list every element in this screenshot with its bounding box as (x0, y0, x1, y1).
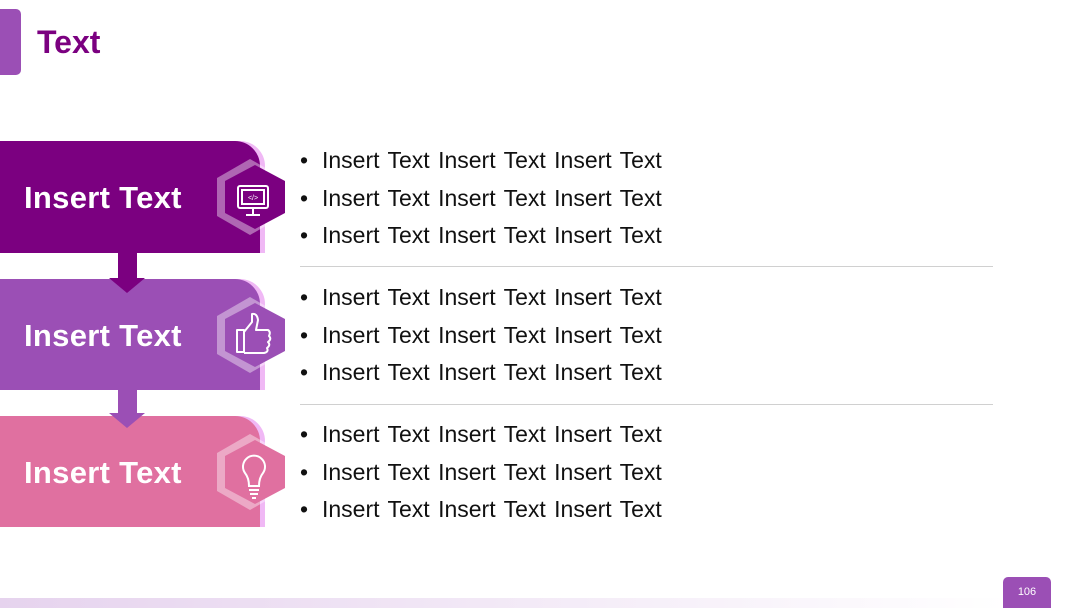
bullet list 2: Insert Text Insert Text Insert Text (322, 359, 662, 385)
icon: lightbulb (243, 456, 265, 498)
arrow 2 (109, 389, 145, 428)
bullet list 3: Insert Text Insert Text Insert Text (322, 458, 662, 484)
page number: 106 (1018, 586, 1036, 598)
bullet list 2: • (300, 284, 308, 310)
title: Text (37, 24, 100, 60)
page number (1003, 577, 1051, 608)
bullet list 3: • (300, 496, 308, 522)
bullet list 3: Insert Text Insert Text Insert Text (322, 496, 662, 522)
step 2 banner (0, 279, 285, 390)
footer gradient bar (0, 598, 1010, 608)
icon: monitor (238, 186, 268, 215)
bullet list 3 (300, 421, 662, 522)
step 2 banner: Insert Text (24, 318, 182, 353)
step 1 banner: </> (248, 195, 258, 202)
bullet list 2: Insert Text Insert Text Insert Text (322, 284, 662, 310)
bullet list 2: Insert Text Insert Text Insert Text (322, 322, 662, 348)
process diagram (0, 141, 285, 527)
step 1 banner: Insert Text (24, 180, 182, 215)
bullet list 3: • (300, 458, 308, 484)
arrow 1 (109, 252, 145, 293)
step 1 banner (0, 141, 285, 253)
step 3 banner: Insert Text (24, 455, 182, 490)
bullet list 1 (300, 147, 662, 248)
bullet list 1: Insert Text Insert Text Insert Text (322, 147, 662, 173)
step 3 banner (0, 416, 285, 527)
bullet list 1: Insert Text Insert Text Insert Text (322, 184, 662, 210)
bullet list 3: • (300, 421, 308, 447)
bullet list 2: • (300, 359, 308, 385)
bullet list 2 (300, 284, 662, 385)
bullet list 2: • (300, 322, 308, 348)
bullet list 1: • (300, 147, 308, 173)
title tab (0, 9, 21, 75)
bullet list 1: Insert Text Insert Text Insert Text (322, 222, 662, 248)
icon: thumbs up (237, 314, 270, 353)
bullet list 3: Insert Text Insert Text Insert Text (322, 421, 662, 447)
bullet list 1: • (300, 184, 308, 210)
bullet list 1: • (300, 222, 308, 248)
